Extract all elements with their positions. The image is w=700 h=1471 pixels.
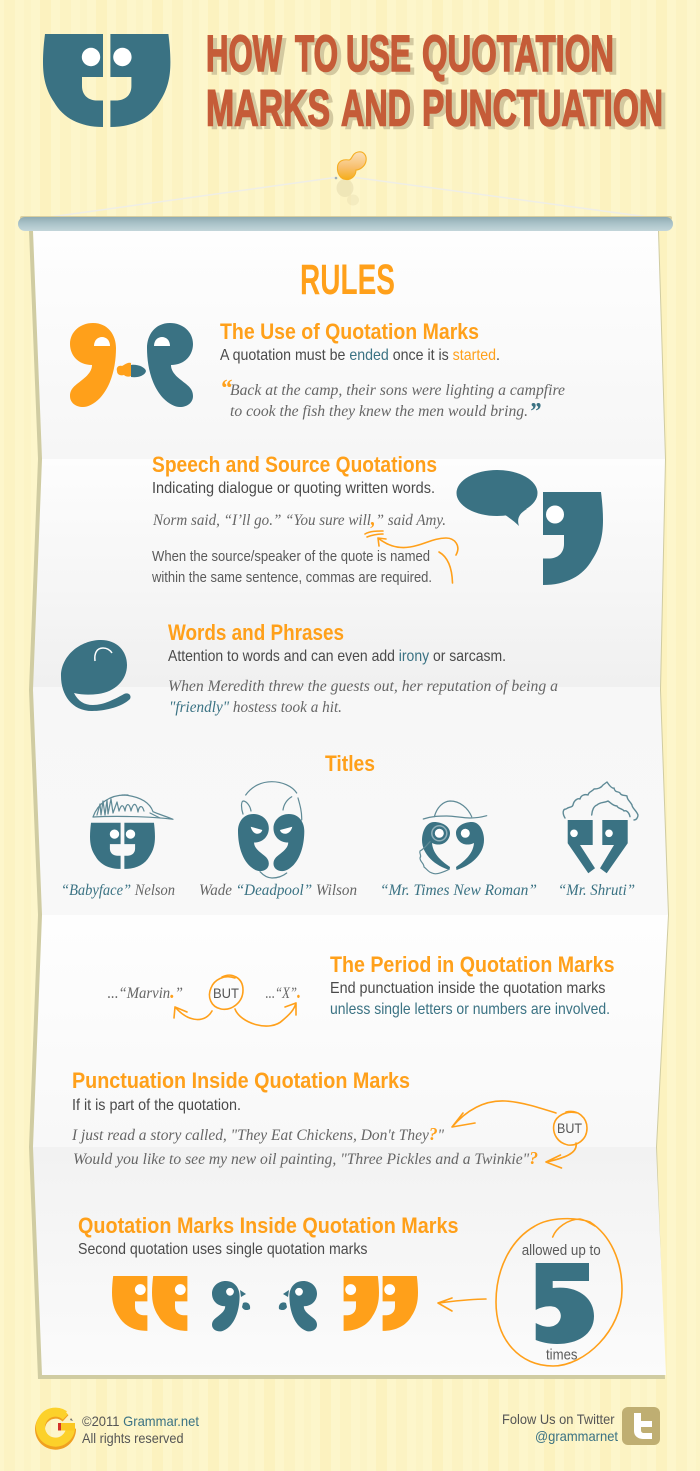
arrow: to row of marks xyxy=(438,1298,486,1311)
footer: twitter text: @grammarnet xyxy=(535,1428,618,1444)
note xyxy=(151,549,432,586)
title: MARKS xyxy=(206,80,330,136)
heading: The Period in Quotation Marks xyxy=(330,952,614,977)
heading: Punctuation Inside Quotation Marks xyxy=(72,1068,410,1093)
caption: “Mr. Times New Roman” xyxy=(380,882,537,899)
note: When the source/speaker of the quote is named xyxy=(152,549,430,565)
icon: face with cap xyxy=(90,795,173,869)
example quote: "friendly" hostess took a hit. xyxy=(169,699,342,716)
icon: speech comma xyxy=(61,640,131,711)
paper shadow xyxy=(29,231,669,1379)
caption: Wade “Deadpool” Wilson xyxy=(199,882,357,899)
arrows xyxy=(174,1003,296,1026)
body: End punctuation inside the quotation marks xyxy=(330,980,606,997)
section: speech and source quotations xyxy=(151,452,458,586)
subheading: Indicating dialogue or quoting written words. xyxy=(152,480,435,497)
character: wade deadpool wilson xyxy=(199,782,357,899)
number 5 xyxy=(536,1263,594,1344)
footer: copyright xyxy=(82,1413,199,1446)
title: USE xyxy=(346,25,411,82)
sketched circle xyxy=(496,1219,622,1366)
text: times xyxy=(546,1346,578,1364)
body xyxy=(330,980,610,1018)
section: words and phrases xyxy=(168,620,558,716)
footer: copyright: ©2011 Grammar.net xyxy=(82,1413,199,1429)
footer: twitter text xyxy=(502,1411,618,1444)
but circle: BUT xyxy=(557,1120,582,1136)
section: the period in quotation marks xyxy=(330,952,614,1018)
heading: Speech and Source Quotations xyxy=(152,452,437,477)
panel: hanging paper xyxy=(20,231,680,1375)
title: MARKS xyxy=(210,82,334,140)
caption: “Babyface” Nelson xyxy=(61,882,175,899)
icon: grammar.net logo xyxy=(40,1410,75,1445)
subheading: A quotation must be ended once it is started. xyxy=(220,347,500,364)
text: allowed up to xyxy=(522,1242,601,1259)
arrow: to comma xyxy=(365,531,458,583)
character: mr. shruti xyxy=(558,782,638,899)
example quote xyxy=(168,678,558,716)
arrows xyxy=(452,1101,576,1168)
logo: quotation mark face xyxy=(43,34,170,127)
examples: Would you like to see my new oil painting, "Three Pickles and a Twinkie"? xyxy=(73,1148,538,1168)
icon: push pin xyxy=(335,152,366,206)
title xyxy=(206,25,667,140)
example quote: Norm said, “I’ll go.” “You sure will,” said Amy. xyxy=(152,508,446,530)
note: within the same sentence, commas are required. xyxy=(151,570,432,586)
diagram: period examples xyxy=(108,975,301,1026)
title: HOW xyxy=(206,25,283,82)
double closing marks xyxy=(344,1276,418,1331)
example quote: “ xyxy=(220,376,232,402)
heading: rules: RULES xyxy=(300,256,395,304)
icon: row of quotation marks xyxy=(112,1276,418,1331)
body: unless single letters or numbers are involved. xyxy=(330,1001,610,1018)
example quote: to cook the fish they knew the men would bring. xyxy=(230,403,528,420)
heading: The Use of Quotation Marks xyxy=(220,319,479,344)
icon: speech bubble and closing mark xyxy=(456,470,603,585)
subheading: Second quotation uses single quotation marks xyxy=(78,1241,368,1258)
section: quotation marks inside quotation marks xyxy=(78,1213,458,1258)
hanging string xyxy=(43,178,655,218)
title: TO xyxy=(299,28,342,85)
icon: commas face with hat and monocle xyxy=(420,801,487,874)
subheading: Attention to words and can even add irony or sarcasm. xyxy=(168,648,506,665)
title: AND xyxy=(345,82,415,140)
title: AND xyxy=(341,80,411,136)
character: babyface nelson xyxy=(61,795,175,899)
examples xyxy=(71,1124,538,1168)
but circle xyxy=(209,975,243,1009)
double opening marks xyxy=(112,1276,187,1331)
heading: Quotation Marks Inside Quotation Marks xyxy=(78,1213,458,1238)
heading: titles: Titles xyxy=(325,751,375,776)
single marks xyxy=(212,1281,317,1331)
example marvin: ...“Marvin.” xyxy=(108,981,183,1003)
roller bar xyxy=(18,216,673,231)
icon: twitter xyxy=(622,1407,660,1445)
title: HOW xyxy=(210,28,287,85)
section: the use of quotation marks xyxy=(220,319,565,425)
examples: I just read a story called, "They Eat Chickens, Don't They?" xyxy=(71,1124,444,1144)
section: punctuation inside quotation marks xyxy=(71,1068,587,1168)
icon: two facing commas xyxy=(70,323,193,407)
character: mr. times new roman xyxy=(380,801,537,899)
footer: copyright: All rights reserved xyxy=(82,1430,184,1446)
but circle: BUT xyxy=(213,985,239,1001)
heading: Words and Phrases xyxy=(168,620,344,645)
title: USE xyxy=(350,28,415,85)
example quote xyxy=(220,376,565,425)
title: TO xyxy=(295,25,338,82)
icon: angular marks face with hair xyxy=(563,782,638,873)
example quote: When Meredith threw the guests out, her reputation of being a xyxy=(168,678,558,695)
example quote: Back at the camp, their sons were lighting a campfire xyxy=(230,382,565,399)
example quote: ” xyxy=(529,399,541,425)
icon: commas face with mask xyxy=(238,782,304,878)
caption: “Mr. Shruti” xyxy=(558,882,635,899)
callout: allowed up to 5 times xyxy=(496,1219,622,1366)
but circle xyxy=(554,1111,587,1145)
example x: ...“X”. xyxy=(266,981,301,1003)
subheading: If it is part of the quotation. xyxy=(72,1097,241,1114)
footer: twitter text: Folow Us on Twitter xyxy=(502,1411,615,1427)
